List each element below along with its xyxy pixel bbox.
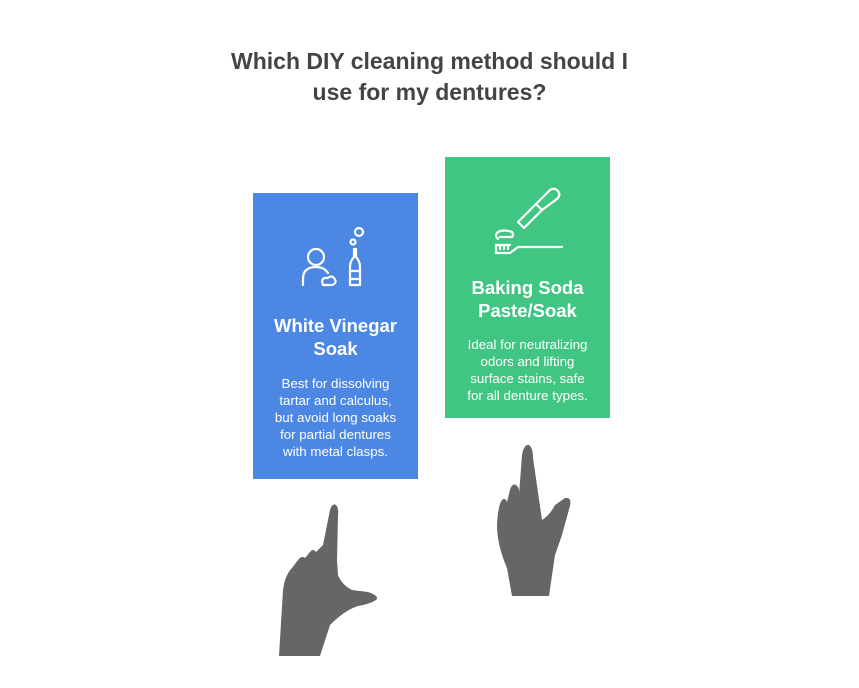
description: Ideal for neutralizing: [468, 337, 587, 352]
title: Which DIY cleaning method should I: [231, 48, 628, 74]
icon: person and vinegar bottle: [302, 226, 364, 286]
panel: white vinegar: [253, 193, 418, 479]
title: use for my dentures?: [313, 79, 546, 105]
panel: baking soda: [445, 157, 610, 418]
description: [275, 376, 396, 459]
description: but avoid long soaks: [275, 410, 396, 425]
description: tartar and calculus,: [279, 393, 392, 408]
description: Best for dissolving: [282, 376, 389, 391]
heading: White Vinegar: [274, 315, 397, 336]
description: [467, 337, 588, 403]
description: odors and lifting: [481, 354, 574, 369]
description: with metal clasps.: [283, 444, 388, 459]
heading: Baking Soda: [471, 277, 584, 298]
title: [231, 48, 628, 105]
description: for all denture types.: [467, 388, 588, 403]
description: for partial dentures: [280, 427, 391, 442]
icon: toothbrush and paste: [494, 188, 564, 254]
description: surface stains, safe: [470, 371, 585, 386]
heading: Soak: [313, 338, 358, 359]
heading: [471, 277, 584, 321]
heading: Paste/Soak: [478, 300, 577, 321]
heading: [274, 315, 397, 359]
